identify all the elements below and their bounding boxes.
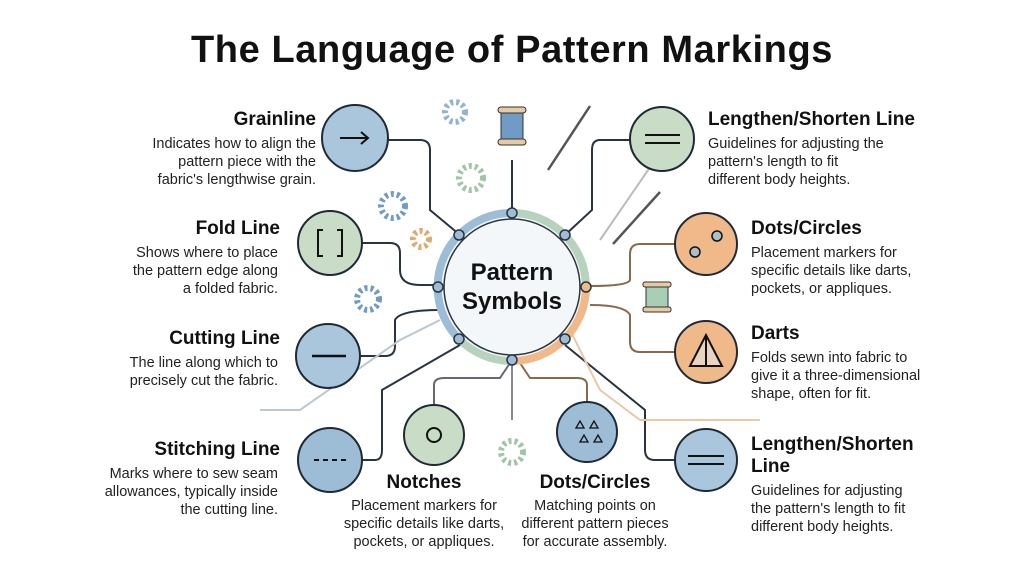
icon circle: notches	[404, 405, 464, 465]
text: dots bottom	[521, 472, 669, 550]
icon: spool right	[643, 282, 671, 312]
text: notches: Placement markers for	[351, 498, 497, 514]
text: fold line: a folded fabric.	[183, 281, 278, 297]
text: darts: Darts	[751, 323, 800, 344]
text: dots bottom: for accurate assembly.	[523, 534, 667, 550]
icon circle: fold	[298, 211, 362, 275]
text: fold line: the pattern edge along	[133, 263, 278, 279]
text: darts	[751, 323, 920, 402]
text: stitching: Stitching Line	[154, 439, 280, 460]
icon: needle 2	[613, 192, 660, 244]
text: dots right	[751, 218, 911, 297]
text: dots right: Placement markers for	[751, 245, 897, 261]
text: lengthen bottom: Guidelines for adjusting	[751, 483, 903, 499]
text: notches: pockets, or appliques.	[353, 534, 495, 550]
text: dots right: Dots/Circles	[751, 218, 862, 239]
text: notches: Notches	[387, 472, 461, 493]
text: cutting	[130, 328, 280, 389]
text: fold line	[133, 218, 280, 297]
text: grainline	[152, 109, 316, 188]
icon circle: darts	[675, 321, 737, 383]
title: The Language of Pattern Markings	[191, 29, 833, 71]
text: darts: give it a three-dimensional	[751, 368, 920, 384]
text: stitching: allowances, typically inside	[105, 484, 278, 500]
text: grainline: fabric's lengthwise grain.	[158, 172, 316, 188]
icon circle: grainline	[322, 105, 388, 171]
gears	[357, 102, 523, 463]
text: lengthen bottom	[751, 434, 914, 535]
text: notches: specific details like darts,	[344, 516, 504, 532]
text: dots bottom: Matching points on	[534, 498, 656, 514]
text: stitching: the cutting line.	[180, 502, 278, 518]
central hub: Pattern	[471, 259, 553, 286]
text: lengthen bottom: different body heights.	[751, 519, 893, 535]
icon circle: triangles	[557, 402, 617, 462]
text: dots right: specific details like darts,	[751, 263, 911, 279]
icon circle: lengthen bottom	[675, 429, 737, 491]
text: cutting: Cutting Line	[169, 328, 280, 349]
text: darts: Folds sewn into fabric to	[751, 350, 907, 366]
text: lengthen top	[708, 109, 915, 188]
text: grainline: Indicates how to align the	[152, 136, 316, 152]
icon circle: cutting	[296, 324, 360, 388]
central hub: Symbols	[462, 288, 562, 315]
connector lines	[260, 140, 760, 460]
icon circle: dots	[675, 213, 737, 275]
text: lengthen bottom: the pattern's length to fit	[751, 501, 905, 517]
text: lengthen top: Lengthen/Shorten Line	[708, 109, 915, 130]
text: dots bottom: different pattern pieces	[521, 516, 669, 532]
text: fold line: Shows where to place	[136, 245, 278, 261]
icon: spool top	[498, 107, 526, 145]
text: lengthen top: pattern's length to fit	[708, 154, 838, 170]
text: lengthen top: Guidelines for adjusting the	[708, 136, 884, 152]
text: stitching	[105, 439, 280, 518]
text: cutting: The line along which to	[130, 355, 278, 371]
text: notches	[344, 472, 504, 550]
central hub	[433, 208, 591, 365]
text: dots bottom: Dots/Circles	[540, 472, 650, 493]
text: fold line: Fold Line	[196, 218, 280, 239]
text: dots right: pockets, or appliques.	[751, 281, 892, 297]
text: darts: shape, often for fit.	[751, 386, 871, 402]
text: cutting: precisely cut the fabric.	[130, 373, 278, 389]
text: grainline: Grainline	[234, 109, 316, 130]
text: lengthen bottom: Line	[751, 456, 790, 477]
text: lengthen top: different body heights.	[708, 172, 850, 188]
text: stitching: Marks where to sew seam	[110, 466, 278, 482]
icon circle: stitching	[298, 428, 362, 492]
icon: needle	[548, 106, 590, 170]
icon circle: lengthen top	[630, 107, 694, 171]
text: lengthen bottom: Lengthen/Shorten	[751, 434, 914, 455]
text: grainline: pattern piece with the	[178, 154, 316, 170]
